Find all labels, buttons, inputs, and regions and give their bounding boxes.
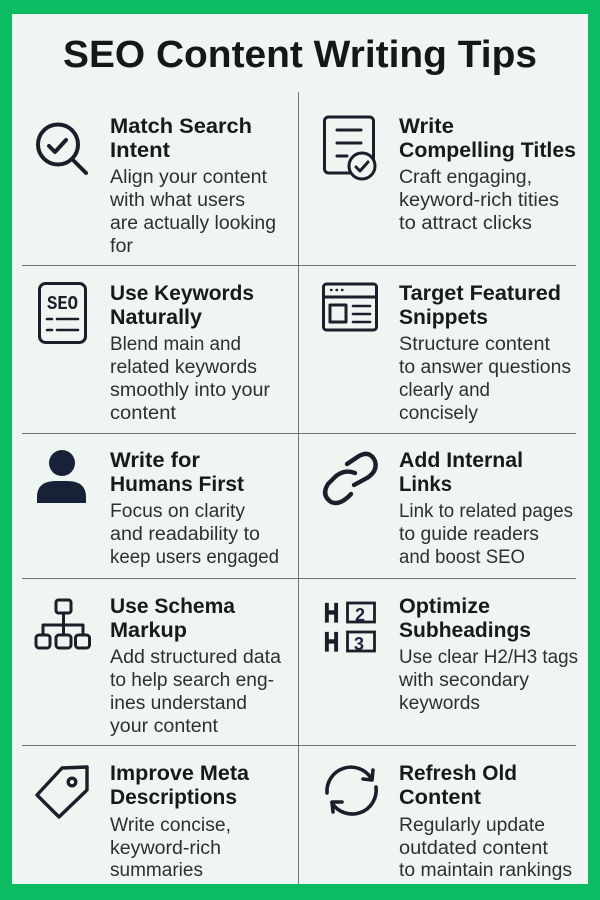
tip: Use Schema Markup [36, 594, 281, 737]
description: Add Internal Links [399, 501, 573, 568]
heading: Write Compelling Titles [399, 114, 576, 162]
description: Target Featured Snippets [399, 334, 571, 424]
heading: Write Compelling Titles: Write [399, 114, 454, 138]
tip: Write for Humans First [37, 448, 279, 568]
heading: Write for Humans First: Write for [110, 448, 201, 472]
description: Use Keywords Naturally [110, 334, 271, 424]
heading: Target Featured Snippets [399, 281, 561, 329]
heading: Use Keywords Naturally: Naturally [110, 305, 202, 329]
icon: H2 and H3 tags: H [324, 627, 339, 657]
heading: Optimize Subheadings: Subheadings [399, 618, 531, 642]
title: SEO Content Writing Tips [63, 34, 537, 76]
heading: Match Search Intent: Intent [110, 138, 170, 162]
heading: Refresh Old Content: Content [399, 785, 481, 809]
description: Improve Meta Descriptions: keyword-rich [110, 838, 221, 859]
heading: Use Schema Markup: Use Schema [110, 594, 236, 618]
heading: Target Featured Snippets: Target Featured [399, 281, 561, 305]
heading: Optimize Subheadings: Optimize [399, 594, 490, 618]
tip: Use Keywords Naturally [40, 281, 271, 424]
heading: Match Search Intent [110, 114, 252, 162]
description: Add Internal Links: to guide readers [399, 524, 539, 545]
tip: Refresh Old Content [327, 761, 572, 881]
description: Optimize Subheadings: Use clear H2/H3 tags [399, 647, 578, 668]
heading: Write for Humans First [110, 448, 244, 496]
icon: SEO document: SEO [47, 293, 78, 315]
description: Add Internal Links: Link to related pages [399, 501, 573, 522]
heading: Use Schema Markup [110, 594, 236, 642]
description: Refresh Old Content: to maintain rankings [399, 860, 572, 881]
description: Add Internal Links: and boost SEO [399, 547, 525, 568]
description: Write for Humans First [110, 501, 279, 568]
description: Match Search Intent: with what users [109, 190, 245, 211]
heading: Add Internal Links: Links [399, 472, 452, 496]
heading: Target Featured Snippets: Snippets [399, 305, 488, 329]
description: Write Compelling Titles: keyword-rich tities [399, 190, 559, 211]
description: Target Featured Snippets: clearly and [399, 380, 490, 401]
heading: Use Schema Markup: Markup [110, 618, 187, 642]
tip: Improve Meta Descriptions [37, 761, 250, 881]
description: Match Search Intent: are actually looking [110, 213, 276, 234]
icon: H2 and H3 tags: 3 [354, 634, 364, 654]
heading: Improve Meta Descriptions: Improve Meta [110, 761, 250, 785]
icon: person [37, 450, 86, 503]
description: Write Compelling Titles: Craft engaging, [399, 167, 532, 188]
tip: Optimize Subheadings [324, 594, 578, 714]
description: Use Schema Markup: ines understand [110, 693, 247, 714]
heading: Add Internal Links [399, 448, 523, 496]
icon: price tag [37, 767, 87, 817]
description: Optimize Subheadings: with secondary [398, 670, 530, 691]
icon: browser window [324, 284, 376, 330]
icon: H2 and H3 tags: H [324, 598, 339, 628]
heading: Improve Meta Descriptions [110, 761, 250, 809]
description: Use Schema Markup: to help search eng- [110, 670, 274, 691]
description: Use Schema Markup: your content [110, 716, 219, 737]
heading: Add Internal Links: Add Internal [399, 448, 523, 472]
icon: document with check [324, 117, 375, 179]
heading: Refresh Old Content: Refresh Old [399, 761, 517, 785]
heading: Refresh Old Content [399, 761, 517, 809]
heading: Write for Humans First: Humans First [110, 472, 244, 496]
icon: chain link [325, 454, 376, 503]
icon: magnifier with check [38, 124, 86, 173]
heading: Write Compelling Titles: Compelling Titles [399, 138, 576, 162]
description: Write for Humans First: keep users engaged [110, 547, 279, 568]
description: Optimize Subheadings: keywords [399, 693, 480, 714]
tip: Add Internal Links [325, 448, 573, 568]
description: Match Search Intent [109, 167, 276, 257]
tip: Match Search Intent [38, 114, 276, 257]
description: Refresh Old Content: Regularly update [399, 815, 545, 836]
description: Use Keywords Naturally: content [110, 403, 177, 424]
description: Write Compelling Titles: to attract clicks [399, 213, 532, 234]
description: Target Featured Snippets: to answer questions [399, 357, 571, 378]
description: Match Search Intent: Align your content [110, 167, 268, 188]
description: Use Keywords Naturally: smoothly into your [110, 380, 271, 401]
description: Target Featured Snippets: Structure content [399, 334, 551, 355]
description: Use Keywords Naturally: related keywords [110, 357, 257, 378]
heading: Use Keywords Naturally: Use Keywords [110, 281, 254, 305]
description: Use Schema Markup [110, 647, 281, 737]
heading: Optimize Subheadings [399, 594, 531, 642]
tip: Write Compelling Titles [324, 114, 576, 234]
heading: Match Search Intent: Match Search [110, 114, 252, 138]
icon: H2 and H3 tags [324, 598, 374, 657]
description: Improve Meta Descriptions [110, 815, 231, 881]
description: Use Keywords Naturally: Blend main and [110, 334, 241, 355]
icon: refresh arrows [327, 767, 376, 814]
heading: Use Keywords Naturally [110, 281, 254, 329]
icon: SEO document [40, 284, 86, 342]
description: Improve Meta Descriptions: summaries [110, 860, 203, 881]
description: Write Compelling Titles [399, 167, 559, 234]
tip: Target Featured Snippets [324, 281, 571, 424]
description: Target Featured Snippets: concisely [399, 403, 478, 424]
icon: H2 and H3 tags: 2 [355, 605, 365, 625]
heading: Improve Meta Descriptions: Descriptions [110, 785, 237, 809]
description: Improve Meta Descriptions: Write concise, [110, 815, 231, 836]
description: Write for Humans First: Focus on clarity [110, 501, 246, 522]
description: Optimize Subheadings [398, 647, 578, 714]
description: Write for Humans First: and readability to [110, 524, 260, 545]
icon: hierarchy diagram [36, 600, 90, 648]
description: Refresh Old Content: outdated content [399, 838, 549, 859]
description: Use Schema Markup: Add structured data [110, 647, 281, 668]
description: Refresh Old Content [399, 815, 572, 881]
description: Match Search Intent: for [110, 236, 134, 257]
